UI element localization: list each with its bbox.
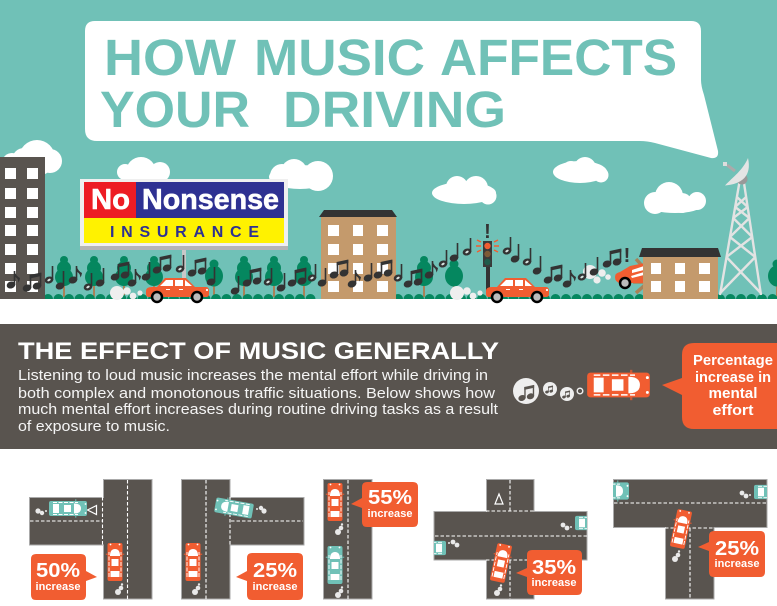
title [100, 29, 677, 138]
title: HOW [104, 29, 237, 86]
callout: 25% increase [236, 553, 303, 600]
legend car [587, 370, 650, 400]
callout: 25% increase: 25% [715, 538, 759, 560]
trees [55, 256, 777, 297]
clouds [2, 140, 706, 214]
hedge row [48, 294, 777, 304]
sky background [0, 0, 777, 300]
radio tower with dish [720, 158, 761, 295]
section body text: Listening to loud music increases the mental effort while driving in [18, 367, 488, 384]
section body text [18, 367, 499, 435]
legend callout: increase in [695, 369, 771, 386]
diagram: T-junction, 25% [613, 479, 768, 600]
callout: 25% increase: increase [252, 581, 298, 593]
callout: 25% increase: 25% [253, 560, 297, 582]
callout: 55% increase [351, 482, 418, 527]
legend callout: effort [712, 402, 754, 419]
callout: 50% increase [31, 554, 97, 600]
billboard: No Nonsense Insurance: Nonsense [142, 184, 279, 216]
panel: the effect of music generally [0, 324, 777, 449]
car under billboard [146, 278, 209, 303]
callout: 50% increase: increase [36, 581, 80, 593]
billboard: No Nonsense Insurance: INSURANCE [110, 224, 259, 241]
title: AFFECTS [440, 29, 677, 86]
music note badges [513, 378, 583, 404]
ground [0, 299, 777, 324]
music notes stream [6, 237, 622, 296]
title speech bubble [85, 21, 718, 158]
crashed car [615, 263, 645, 289]
crash debris burst [632, 259, 646, 293]
section body text: much mental effort increases during routine driving tasks as a result [18, 401, 499, 418]
exclamation mark at crash: ! [624, 245, 630, 267]
grey tower block [0, 157, 45, 299]
billboard: No Nonsense Insurance: No [91, 184, 130, 216]
title: MUSIC [254, 29, 425, 86]
section heading: THE EFFECT OF MUSIC GENERALLY [18, 338, 499, 365]
diagram: turning right across traffic, 50% [30, 480, 152, 600]
section body text: of exposure to music. [18, 418, 170, 435]
building hit by car [639, 248, 721, 299]
callout: 55% increase: increase [368, 508, 412, 520]
exhaust puffs [110, 265, 611, 300]
callout: 25% increase: increase [714, 558, 760, 570]
legend callout: Percentage [693, 352, 773, 369]
traffic light [476, 221, 499, 291]
car at traffic light [486, 278, 549, 303]
legend callout: mental [708, 385, 758, 402]
callout: 35% increase: 35% [532, 557, 576, 579]
diagram: crossing a junction, 35% [434, 479, 588, 600]
tan building [319, 210, 397, 299]
callout: 55% increase: 55% [368, 487, 412, 509]
diagram: following traffic, 55% [324, 480, 418, 599]
legend callout [662, 343, 777, 429]
traffic light: ! [484, 221, 491, 243]
callout: 25% increase [698, 531, 765, 577]
diagram: turning left into traffic, 25% [182, 480, 304, 600]
callout: 50% increase: 50% [36, 560, 80, 582]
callout: 35% increase [516, 550, 582, 595]
title: DRIVING [283, 81, 506, 138]
section body text: both complex and monotonous traffic situations. Below shows how [18, 385, 495, 402]
billboard: No Nonsense Insurance [80, 179, 288, 282]
callout: 35% increase: increase [532, 577, 576, 589]
title: YOUR [100, 81, 250, 138]
